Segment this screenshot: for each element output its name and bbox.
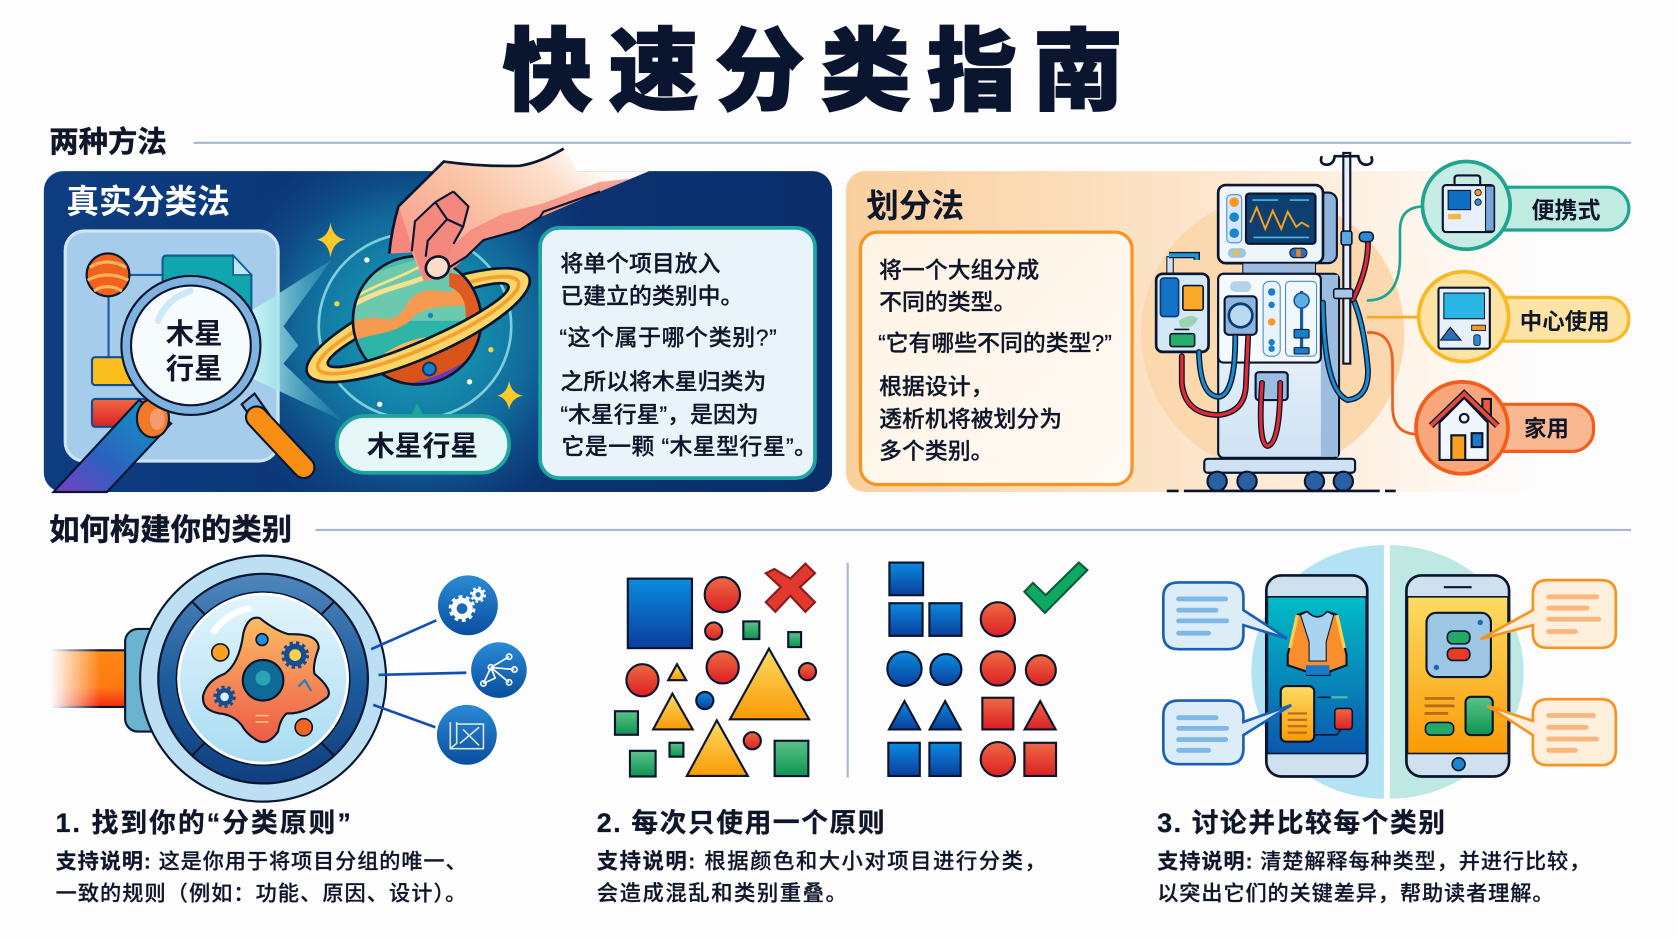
- neck: [1243, 263, 1316, 274]
- icon: blueprint: [437, 705, 497, 765]
- icon: house: [1431, 394, 1497, 460]
- collar: [125, 629, 163, 732]
- light beam: [252, 260, 342, 420]
- step 1 text: 一致的规则（例如：功能、原因、设计）。: [56, 882, 467, 906]
- text card: method description: 它是一颗 “木星型行星”。: [561, 434, 817, 460]
- magnifier: [53, 276, 304, 492]
- lens label: [166, 318, 222, 386]
- tubes: [1182, 240, 1368, 446]
- step 2 text: [597, 808, 1047, 906]
- heading: how to build categories: 如何构建你的类别: [49, 513, 292, 547]
- step 3 text: [1157, 808, 1591, 906]
- planet: [352, 255, 482, 386]
- text card: 多个类别。: [879, 438, 994, 464]
- step 2 illustration: sorted shapes: [887, 563, 1087, 776]
- step 2 text: 2. 每次只使用一个原则: [597, 808, 886, 838]
- title: 快速分类指南: [503, 23, 1139, 123]
- heading: two methods: 两种方法: [49, 126, 167, 159]
- panel: partition method: [846, 153, 1629, 492]
- text card: 不同的类型。: [879, 289, 1016, 315]
- panel heading: 划分法: [866, 187, 964, 224]
- icon: cross: [766, 564, 815, 612]
- step 3 text: 支持说明: 清楚解释每种类型，并进行比较，: [1157, 849, 1591, 873]
- bubble: right top: [1481, 580, 1616, 648]
- hand: [389, 149, 649, 282]
- cell: [203, 618, 329, 742]
- iv pole: [1321, 153, 1372, 364]
- text card: method description: 将单个项目放入: [560, 251, 721, 277]
- step 1 text: 1. 找到你的“分类原则”: [56, 808, 353, 838]
- category: center use: [1419, 272, 1629, 362]
- dialysis machine: [1156, 153, 1396, 491]
- monitor: [1218, 185, 1323, 263]
- vest: [1288, 612, 1347, 675]
- text card: method description: 之所以将木星归类为: [560, 368, 766, 394]
- category: home: 家用: [1524, 415, 1569, 441]
- icon: network: [471, 642, 527, 698]
- text card: [860, 232, 1132, 485]
- icon: check: [1024, 563, 1087, 613]
- category: portable: [1422, 162, 1629, 249]
- text card: 透析机将被划分为: [879, 406, 1062, 432]
- icon: gears: [438, 575, 498, 635]
- backdrop circle: [1141, 197, 1404, 471]
- sparkles: [317, 222, 523, 410]
- bubble: left bottom: [1163, 701, 1291, 764]
- category: portable: 便携式: [1532, 197, 1601, 223]
- right phone: [1406, 575, 1509, 776]
- handle: [48, 650, 126, 707]
- bubble: right bottom: [1488, 699, 1616, 765]
- text card: 根据设计，: [879, 374, 994, 400]
- panel: real classification: [44, 149, 832, 492]
- step 3 text: 以突出它们的关键差异，帮助读者理解。: [1157, 882, 1554, 906]
- lens rim: [140, 556, 386, 802]
- orbit ring: [319, 233, 511, 419]
- text card: method description: “这个属于哪个类别?”: [559, 324, 777, 350]
- connector lines: [1367, 206, 1425, 434]
- planet ring front: [306, 276, 532, 384]
- panel heading: 真实分类法: [66, 183, 230, 220]
- step 1 illustration: magnified cell: [43, 556, 386, 802]
- step 1 text: 支持说明: 这是你用于将项目分组的唯一、: [56, 849, 468, 873]
- category: center use: 中心使用: [1520, 309, 1610, 334]
- left phone: [1266, 575, 1367, 776]
- icon: center kiosk: [1438, 288, 1490, 349]
- text card: 将一个大组分成: [879, 257, 1039, 283]
- base and wheels: [1167, 459, 1396, 491]
- step 2 text: 支持说明: 根据颜色和大小对项目进行分类，: [597, 849, 1047, 873]
- step 2 illustration: mixed shapes: [615, 564, 816, 776]
- pointer lines: [371, 620, 466, 727]
- planet ring back: [294, 247, 542, 404]
- step 3 illustration: compare phones: [1163, 545, 1616, 799]
- category: home: [1416, 382, 1594, 474]
- step 1 text: [56, 808, 468, 906]
- label: Jupiter planet: 木星行星: [367, 431, 478, 462]
- text card: method description: 已建立的类别中。: [560, 283, 743, 309]
- bubble: left top: [1163, 582, 1287, 649]
- text card: “它有哪些不同的类型?”: [878, 330, 1112, 356]
- side module: [1156, 255, 1209, 352]
- lens label: 木星: [166, 318, 222, 350]
- hierarchy card: [65, 231, 278, 461]
- text card: method description: “木星行星”，是因为: [560, 401, 759, 427]
- backdrop half circles: [1251, 545, 1384, 799]
- lens label: 行星: [166, 354, 222, 386]
- label: Jupiter planet: [337, 403, 509, 473]
- icon: portable device: [1443, 175, 1494, 232]
- step 3 text: 3. 讨论并比较每个类别: [1157, 808, 1447, 838]
- text card: method description: [540, 228, 817, 478]
- step 2 text: 会造成混乱和类别重叠。: [597, 882, 848, 906]
- cabinet: [1218, 274, 1339, 458]
